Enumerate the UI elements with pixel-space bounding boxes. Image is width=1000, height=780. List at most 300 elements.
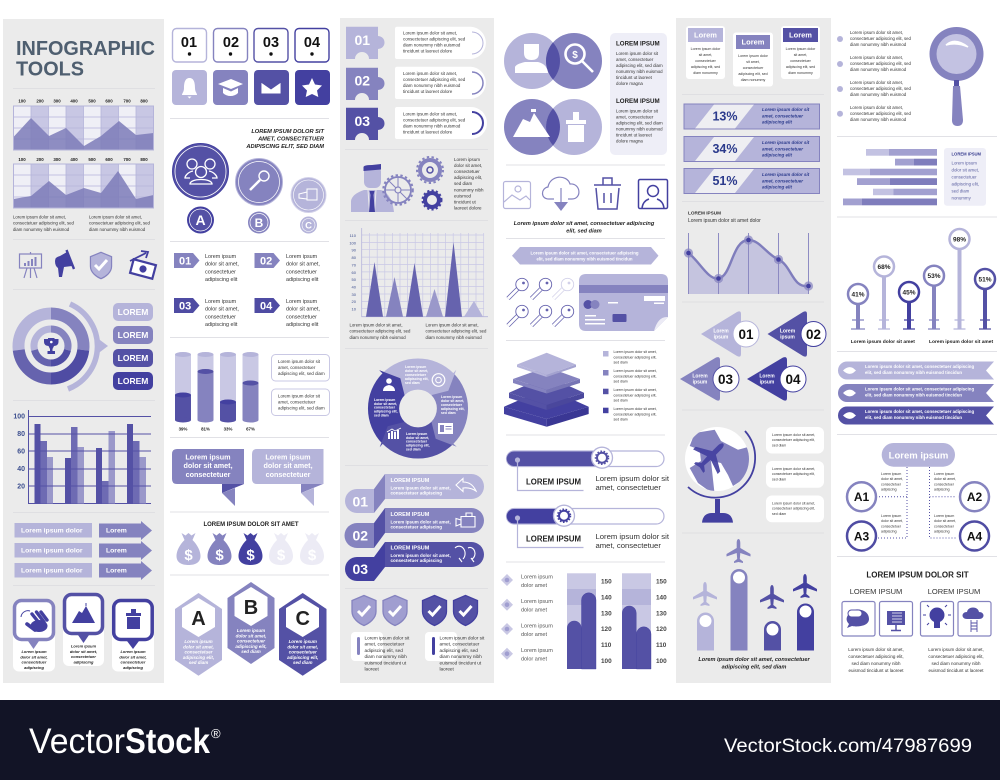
puzzle steps 01-03 bbox=[346, 27, 384, 140]
panel: column 3 background bbox=[340, 18, 494, 683]
plane bar chart bbox=[693, 539, 817, 650]
circular cycle diagram: Lorem ipsum bbox=[374, 398, 395, 402]
spike chart: 70 bbox=[352, 262, 357, 268]
puzzle step text pills: consectetuer adipiscing elit, sed bbox=[403, 36, 466, 42]
header cards: diam nonummy bbox=[693, 71, 718, 75]
puzzle steps 01-03: 02 bbox=[354, 72, 370, 88]
numbered tags 01-04 bbox=[174, 253, 320, 328]
bottom right text blocks: euismod tincidunt ut laoreet bbox=[848, 668, 904, 673]
hexagon A: dolor sit amet, bbox=[183, 644, 214, 649]
circular cycle diagram: Lorem ipsum bbox=[406, 432, 427, 436]
rows with arrows: Lorem bbox=[106, 548, 127, 554]
ribbon step 02: Lorem ipsum dolor sit amet, bbox=[390, 520, 451, 524]
bottom right heading: LOREM IPSUM bbox=[928, 587, 980, 596]
area chart 1: 100 bbox=[18, 98, 26, 104]
percent bar 51%: amet, consectetuer bbox=[762, 178, 803, 183]
icon row: presentation, megaphone, shield, money bbox=[20, 250, 156, 279]
numbered boxes 01-04: 03 bbox=[263, 35, 279, 51]
rounded column chart 2: 150 bbox=[656, 578, 667, 586]
circular cycle diagram: adipiscing elit, bbox=[441, 407, 465, 411]
area chart 1: 800 bbox=[140, 98, 148, 104]
percentage pins: 98% bbox=[953, 236, 966, 244]
hexagon C bbox=[279, 593, 326, 676]
line chart bbox=[684, 210, 813, 294]
circular cycle diagram: adipiscing elit, bbox=[405, 377, 429, 381]
bottom right text blocks: euismod tincidunt ut laoreet bbox=[928, 668, 984, 673]
icon card: mountain bbox=[63, 594, 104, 666]
shield text blocks: diam nonummy nibh bbox=[364, 654, 407, 659]
money bags bbox=[176, 522, 324, 565]
hexagon B: Lorem ipsum bbox=[237, 628, 265, 633]
percentage pins: 41% bbox=[851, 292, 865, 298]
stacked bars legend: sed diam bbox=[952, 188, 970, 194]
text panel bbox=[610, 33, 667, 155]
plane chart caption: adipiscing elit, sed diam bbox=[722, 665, 786, 671]
bar chart: 60 bbox=[17, 448, 25, 456]
numbered tags 01-04: 04 bbox=[260, 300, 273, 312]
A1-A4 diagram: adipiscing bbox=[934, 488, 950, 492]
spike chart: Lorem ipsum dolor sit amet, bbox=[426, 322, 479, 328]
text panel: adipiscing elit, sed diam bbox=[616, 63, 663, 68]
speech ribbon 1: dolor sit amet, bbox=[183, 461, 233, 470]
text panel: tincidunt ut laoreet bbox=[616, 132, 653, 138]
header cards: sit amet, bbox=[699, 53, 712, 57]
percent bar 34%: amet, consectetuer bbox=[762, 146, 803, 151]
circular cycle diagram: sed diam bbox=[406, 448, 421, 452]
spike chart: 100 bbox=[349, 240, 357, 246]
percentage pins: 51% bbox=[978, 276, 992, 284]
circular cycle diagram: adipiscing elit, bbox=[406, 444, 430, 448]
numbered boxes 01-04: 04 bbox=[304, 35, 320, 51]
icon card: mountain: Lorem ipsum bbox=[71, 644, 96, 648]
horizontal stacked bars bbox=[843, 149, 937, 205]
ribbon step 01: Lorem ipsum dolor sit amet, bbox=[390, 486, 451, 490]
text panel: nonummy nibh euismod bbox=[616, 126, 663, 132]
businessman text bbox=[454, 157, 484, 210]
money bags: LOREM IPSUM DOLOR SIT AMET bbox=[203, 522, 299, 528]
ribbon step 03: LOREM IPSUM bbox=[390, 546, 430, 552]
text panel: LOREM IPSUM bbox=[616, 98, 660, 105]
area chart 2: 500 bbox=[88, 157, 96, 162]
spike chart: Lorem ipsum dolor sit amet, bbox=[350, 322, 403, 328]
diamond bullet list: Lorem ipsum bbox=[521, 574, 553, 580]
spike chart: diam nonummy nibh euismod bbox=[350, 335, 406, 340]
venn diagram 1: $ bbox=[572, 50, 578, 61]
icon card: podium: Lorem ipsum bbox=[120, 649, 146, 654]
globe text cards: consectetuer adipiscing elit, bbox=[772, 438, 815, 442]
rounded column chart 2: 140 bbox=[656, 594, 667, 602]
puzzle step text pills: Lorem ipsum dolor sit amet, bbox=[403, 71, 457, 76]
globe text cards: consectetuer adipiscing elit, bbox=[772, 472, 815, 476]
chart captions bbox=[13, 214, 151, 232]
bullet list: diam nonummy nibh euismod bbox=[850, 92, 907, 97]
diamond bullet list: dolor amet bbox=[521, 608, 547, 614]
text boxes beside cylinders bbox=[272, 354, 330, 416]
icon card: hand bbox=[13, 600, 55, 672]
text boxes beside cylinders: amet, consectetuer bbox=[278, 365, 316, 370]
arrow 04: Lorem bbox=[759, 374, 775, 380]
ribbon step 02: 02 bbox=[352, 528, 368, 544]
globe text cards: Lorem ipsum dolor sit amet, bbox=[772, 433, 815, 437]
businessman text: sed diam bbox=[454, 181, 473, 186]
ribbon step 01 bbox=[345, 474, 484, 513]
hexagon C: Lorem ipsum bbox=[289, 639, 317, 644]
diamond bullet list: Lorem ipsum bbox=[521, 648, 553, 654]
progress slider 2: LOREM IPSUM bbox=[526, 534, 581, 544]
percent bar 13%: 13% bbox=[712, 110, 738, 124]
chart captions: diam nonummy nibh euismod bbox=[13, 227, 70, 232]
arrow 02: ipsum bbox=[780, 334, 795, 340]
spike chart: 50 bbox=[352, 277, 357, 282]
text panel: Lorem ipsum dolor sit bbox=[616, 108, 658, 114]
hexagon B: consectetuer bbox=[237, 639, 265, 644]
circular cycle diagram: dolor sit amet, bbox=[441, 399, 464, 403]
shield text blocks: amet, consectetuer bbox=[440, 642, 480, 647]
text boxes beside cylinders: amet, consectetuer bbox=[278, 400, 316, 404]
percentage pins: 53% bbox=[927, 273, 941, 280]
puzzle steps 01-03: 03 bbox=[354, 113, 370, 129]
lorem buttons: LOREM bbox=[118, 376, 148, 386]
title: INFOGRAPHIC bbox=[16, 37, 155, 60]
text boxes beside cylinders: Lorem ipsum dolor sit bbox=[278, 394, 320, 398]
percent bar 51%: Lorem ipsum dolor sit bbox=[762, 172, 809, 177]
text panel: adipiscing elit, sed diam bbox=[616, 120, 663, 126]
progress slider 1 bbox=[506, 447, 670, 492]
bullet list: Lorem ipsum dolor sit amet, bbox=[850, 30, 903, 35]
circle icons: people, key, camera bbox=[172, 144, 326, 212]
icon card: mountain: consectetuer bbox=[71, 654, 96, 659]
hexagon banner: elit, sed diam nonummy nibh euismod tincidun bbox=[537, 256, 633, 262]
hexagon C: consectetuer bbox=[289, 650, 317, 655]
arrow 03: ipsum bbox=[693, 380, 708, 386]
spike chart: diam nonummy nibh euismod bbox=[426, 335, 482, 340]
footer logo: Vector bbox=[29, 722, 125, 761]
bullet list: Lorem ipsum dolor sit amet, bbox=[850, 105, 903, 110]
text panel: nonummy nibh euismod bbox=[616, 69, 663, 74]
lorem buttons: LOREM bbox=[118, 353, 148, 363]
speech ribbon 1: consectetuer bbox=[186, 470, 231, 479]
isometric layers bbox=[504, 353, 589, 427]
lorem buttons bbox=[113, 303, 153, 390]
bullet list: diam nonummy nibh euismod bbox=[850, 42, 907, 47]
puzzle step text pills: diam nonummy nibh euismod bbox=[403, 124, 461, 128]
heading: lorem ipsum dolor: LOREM IPSUM DOLOR SIT bbox=[251, 129, 325, 135]
circular cycle diagram: sed diam bbox=[441, 411, 456, 415]
A1-A4 diagram: A2 bbox=[967, 490, 982, 504]
progress slider 2: amet, consectetuer bbox=[596, 541, 661, 550]
spike chart: 40 bbox=[352, 284, 357, 290]
letter badges A B C: B bbox=[255, 216, 264, 230]
circular cycle diagram: dolor sit amet, bbox=[374, 402, 397, 406]
percent bar 34%: adipiscing elit bbox=[762, 153, 793, 158]
area chart 1: 300 bbox=[53, 98, 61, 104]
rounded column chart 2 bbox=[622, 573, 667, 669]
speech ribbon 1 bbox=[172, 449, 244, 506]
layers legend: Lorem ipsum dolor sit amet, bbox=[614, 407, 657, 411]
circular cycle diagram: adipiscing elit, bbox=[374, 410, 398, 414]
area chart 1: 600 bbox=[105, 98, 113, 104]
hexagon B: dolor sit amet, bbox=[236, 633, 266, 638]
donut chart with trophy bbox=[19, 304, 108, 389]
header cards: consectetuer bbox=[743, 66, 764, 70]
spike chart: 30 bbox=[352, 292, 357, 297]
money bags: $ bbox=[215, 547, 224, 564]
chart captions: Lorem ipsum dolor sit amet, bbox=[89, 214, 142, 220]
stacked bars legend: LOREM IPSUM bbox=[952, 152, 982, 157]
hexagon A: consectetuer bbox=[184, 650, 213, 655]
percentage pins: 68% bbox=[877, 264, 891, 271]
hexagon C: C bbox=[295, 608, 310, 630]
progress slider 2: Lorem ipsum dolor sit bbox=[596, 532, 669, 541]
cylinder chart: 67% bbox=[246, 426, 255, 432]
puzzle step text pills: diam nonummy nibh euismod bbox=[403, 83, 461, 88]
rounded column chart 1: 100 bbox=[601, 658, 612, 665]
icon card: hand: dolor sit amet, bbox=[20, 654, 48, 659]
title: TOOLS bbox=[16, 58, 84, 80]
globe text cards: sed diam bbox=[772, 512, 786, 516]
rows with arrows: Lorem bbox=[106, 568, 127, 574]
area chart 2: 600 bbox=[105, 157, 113, 162]
area chart 2: 200 bbox=[36, 157, 44, 162]
area chart 2: 300 bbox=[53, 157, 61, 162]
globe text cards bbox=[766, 427, 824, 522]
rounded column chart 1: 110 bbox=[601, 642, 612, 649]
bottom right text blocks: Lorem ipsum dolor sit amet, bbox=[928, 647, 984, 652]
layers legend: sed diam bbox=[614, 380, 628, 384]
icon card: hand: Lorem ipsum bbox=[21, 649, 47, 654]
progress slider 1: LOREM IPSUM bbox=[526, 478, 581, 486]
bar chart: 20 bbox=[17, 484, 25, 490]
area chart 1: 400 bbox=[70, 98, 78, 104]
text panel: amet, consectetuer bbox=[616, 57, 654, 62]
icon card: mountain: dolor sit amet, bbox=[70, 649, 97, 654]
shield text blocks: euismod tincidunt ut bbox=[364, 660, 407, 665]
businessman text: euismod bbox=[454, 193, 472, 198]
puzzle step text pills: tincidunt ut laoreet dolore bbox=[403, 130, 453, 134]
stacked bars legend: adipiscing elit, bbox=[952, 182, 979, 186]
shield text blocks: Lorem ipsum dolor sit bbox=[440, 636, 484, 640]
A1-A4 diagram: adipiscing bbox=[934, 530, 950, 534]
ribbon step 01: 01 bbox=[352, 494, 368, 510]
spike chart: 90 bbox=[352, 248, 357, 252]
icon card: podium bbox=[112, 600, 154, 672]
businessman text: consectetuer bbox=[454, 169, 480, 174]
header cards: consectetuer bbox=[790, 59, 812, 63]
footer url: VectorStock.com/47987699 bbox=[724, 736, 972, 757]
hexagon A: adipiscing elit, bbox=[183, 655, 214, 660]
layers legend bbox=[603, 350, 657, 422]
bottom right text blocks: Lorem ipsum dolor sit amet, bbox=[848, 647, 904, 652]
percent bar 34%: Lorem ipsum dolor sit bbox=[762, 140, 809, 145]
hexagon C: adipiscing elit, bbox=[287, 655, 318, 660]
arrow 03: 03 bbox=[718, 372, 733, 387]
layers legend: consectetuer adipiscing elit, bbox=[614, 355, 657, 359]
hexagon C: sed diam bbox=[293, 660, 312, 665]
circular cycle diagram: sed diam bbox=[374, 414, 389, 418]
A1-A4 diagram: Lorem ipsum bbox=[934, 472, 954, 476]
layers legend: consectetuer adipiscing elit, bbox=[614, 393, 657, 397]
lorem buttons: LOREM bbox=[118, 307, 148, 317]
ribbon step 03: consectetuer adipiscing bbox=[390, 558, 442, 563]
A1-A4 diagram: consectetuer bbox=[934, 524, 955, 528]
header cards: Lorem bbox=[694, 30, 717, 40]
arrow 01: ipsum bbox=[714, 334, 729, 340]
area chart 2: 100 bbox=[18, 157, 26, 162]
layers legend: Lorem ipsum dolor sit amet, bbox=[614, 350, 657, 354]
hexagon B: adipiscing elit, bbox=[235, 644, 267, 649]
numbered tags 01-04: 03 bbox=[179, 300, 191, 312]
area chart 1: 200 bbox=[36, 98, 44, 104]
area chart 2: 700 bbox=[123, 157, 131, 162]
arrow 02: 02 bbox=[806, 327, 821, 342]
spike chart: 20 bbox=[352, 299, 357, 304]
A1-A4 diagram: dolor sit amet, bbox=[934, 519, 956, 523]
progress slider 1: amet, consectetuer bbox=[596, 483, 661, 492]
stacked bars legend: nonummy bbox=[952, 196, 972, 200]
percent bar 34% bbox=[684, 136, 820, 162]
bottom right text blocks: sed diam nonummy nibh bbox=[851, 661, 901, 666]
bottom right text blocks bbox=[848, 647, 984, 673]
bottom right heading: LOREM IPSUM DOLOR SIT bbox=[866, 570, 969, 580]
businessman text: laoreet dolore bbox=[454, 205, 482, 210]
layers legend: sed diam bbox=[614, 361, 628, 365]
letter badges A B C: A bbox=[195, 212, 206, 228]
arrow 01 bbox=[701, 311, 759, 357]
cylinder chart bbox=[175, 352, 258, 432]
numbered tags 01-04: 02 bbox=[260, 256, 272, 268]
A1-A4 diagram: consectetuer bbox=[934, 482, 955, 486]
hexagon A: A bbox=[191, 608, 206, 630]
circular cycle diagram: consectetuer bbox=[405, 373, 427, 377]
A1-A4 diagram: A3 bbox=[854, 530, 869, 544]
A1-A4 diagram: adipiscing bbox=[881, 488, 897, 492]
spike chart bbox=[349, 228, 488, 340]
rounded column chart 2: 130 bbox=[656, 610, 667, 618]
shield text blocks: diam nonummy nibh bbox=[440, 654, 482, 659]
A1-A4 diagram: consectetuer bbox=[881, 482, 902, 486]
bar chart: 40 bbox=[17, 466, 25, 473]
numbered tags 01-04: consectetuer bbox=[205, 269, 236, 275]
puzzle step text pills: consectetuer adipiscing elit, sed bbox=[403, 118, 466, 122]
numbered tags 01-04: adipiscing elit bbox=[205, 277, 238, 283]
A1-A4 diagram: dolor sit amet, bbox=[881, 477, 903, 481]
globe text cards: Lorem ipsum dolor sit amet, bbox=[772, 467, 815, 471]
puzzle step text pills: diam nonummy nibh euismod bbox=[403, 42, 461, 48]
diamond bullet list: dolor amet bbox=[521, 657, 547, 663]
rounded column chart 2: 100 bbox=[656, 658, 667, 665]
cylinder chart: 39% bbox=[179, 426, 187, 432]
keys bbox=[508, 278, 574, 326]
header cards: sit amet, bbox=[746, 60, 760, 64]
text boxes beside cylinders: Lorem ipsum dolor sit bbox=[278, 359, 320, 364]
hexagon A bbox=[175, 593, 222, 676]
hexagon banner: Lorem ipsum dolor sit amet, consectetuer adipiscing bbox=[531, 250, 638, 256]
icon: magnifying glass bbox=[930, 27, 984, 126]
rows with arrows: Lorem bbox=[106, 528, 127, 534]
stacked bars legend bbox=[944, 148, 986, 206]
circular cycle diagram: dolor sit amet, bbox=[405, 369, 428, 373]
ribbon step 03: Lorem ipsum dolor sit amet, bbox=[390, 553, 451, 558]
businessman text: Lorem ipsum bbox=[454, 157, 480, 162]
ribbons bbox=[838, 362, 994, 424]
shield text blocks: amet, consectetuer bbox=[364, 642, 405, 647]
numbered tags 01-04: Lorem ipsum bbox=[205, 254, 236, 260]
numbered boxes 01-04: 01 bbox=[181, 35, 197, 51]
speech ribbon 1: Lorem ipsum bbox=[185, 452, 231, 462]
rows with arrows: Lorem ipsum dolor bbox=[21, 548, 83, 554]
bullet list: Lorem ipsum dolor sit amet, bbox=[850, 55, 903, 60]
stacked bars legend: dolor sit amet, bbox=[952, 168, 979, 172]
layers legend: Lorem ipsum dolor sit amet, bbox=[614, 369, 657, 373]
bullet list: consectetuer adipiscing elit, sed bbox=[850, 111, 912, 116]
businessman text: adipiscing elit, bbox=[454, 175, 482, 180]
percent bar 13%: adipiscing elit bbox=[762, 120, 793, 125]
numbered tags 01-04: Lorem ipsum bbox=[286, 254, 317, 260]
shield text blocks: Lorem ipsum dolor sit bbox=[364, 636, 409, 640]
cylinder chart: 81% bbox=[201, 426, 210, 432]
shield text blocks: laoreet bbox=[440, 666, 455, 672]
area chart 2 bbox=[14, 157, 154, 208]
bottom right text blocks: consectetuer adipiscing elit, bbox=[928, 654, 984, 659]
icon card: podium: dolor sit amet, bbox=[119, 654, 147, 659]
numbered tags 01-04: adipiscing elit bbox=[286, 322, 319, 328]
chart captions: consectetuer adipiscing elit, sed bbox=[13, 221, 75, 226]
header cards bbox=[686, 26, 820, 86]
percent bar 51%: 51% bbox=[712, 174, 738, 188]
speech ribbon 2: dolor sit amet, bbox=[263, 461, 313, 470]
progress slider 1: Lorem ipsum dolor sit bbox=[596, 474, 669, 483]
hexagon B bbox=[228, 582, 274, 664]
icon card: podium: consectetuer bbox=[121, 660, 146, 665]
businessman text: nonummy nibh bbox=[454, 187, 484, 192]
layers legend: consectetuer adipiscing elit, bbox=[614, 374, 657, 378]
circular cycle diagram: consectetuer bbox=[441, 403, 463, 407]
icons caption: elit, sed diam bbox=[566, 229, 602, 235]
A1-A4 diagram: Lorem ipsum bbox=[881, 514, 901, 518]
circular cycle diagram: Lorem ipsum bbox=[405, 365, 426, 369]
icon card: hand: consectetuer bbox=[22, 660, 47, 665]
hexagon A: Lorem ipsum bbox=[184, 639, 213, 644]
spike chart: 60 bbox=[352, 270, 357, 275]
numbered tags 01-04: 01 bbox=[179, 256, 191, 268]
chart captions: diam nonummy nibh euismod bbox=[89, 227, 146, 232]
rounded column chart 1: 150 bbox=[601, 578, 612, 586]
A1-A4 diagram: Lorem ipsum bbox=[934, 514, 954, 518]
layers legend: sed diam bbox=[614, 418, 628, 422]
shield text blocks: euismod tincidunt ut bbox=[440, 660, 482, 665]
progress slider 2 bbox=[506, 505, 670, 550]
header cards: sit amet, bbox=[794, 53, 807, 57]
bottom right heading: LOREM IPSUM bbox=[850, 587, 902, 596]
percentage pins: Lorem ipsum dolor sit amet bbox=[851, 339, 915, 345]
letter badges A B C bbox=[187, 206, 317, 234]
A1-A4 diagram: A1 bbox=[854, 490, 869, 504]
puzzle step text pills: Lorem ipsum dolor sit amet, bbox=[403, 112, 457, 116]
text boxes beside cylinders: adipiscing elit, sed diam bbox=[278, 406, 325, 410]
A1-A4 diagram: dolor sit amet, bbox=[934, 477, 956, 481]
icon card: mountain: adipiscing bbox=[74, 659, 94, 664]
ribbon step 01: LOREM IPSUM bbox=[390, 478, 430, 484]
numbered tags 01-04: dolor sit amet, bbox=[286, 262, 320, 268]
heading: lorem ipsum dolor bbox=[245, 129, 325, 150]
ribbon step 01: consectetuer adipiscing bbox=[390, 490, 442, 496]
rounded column chart 1 bbox=[567, 573, 612, 669]
numbered boxes 01-04 bbox=[172, 28, 329, 62]
cylinder chart: 33% bbox=[224, 426, 232, 432]
layers legend: Lorem ipsum dolor sit amet, bbox=[614, 388, 657, 392]
ribbons: elit, sed diam nonummy nibh euismod tincidun bbox=[865, 415, 962, 420]
layers legend: consectetuer adipiscing elit, bbox=[614, 412, 657, 416]
